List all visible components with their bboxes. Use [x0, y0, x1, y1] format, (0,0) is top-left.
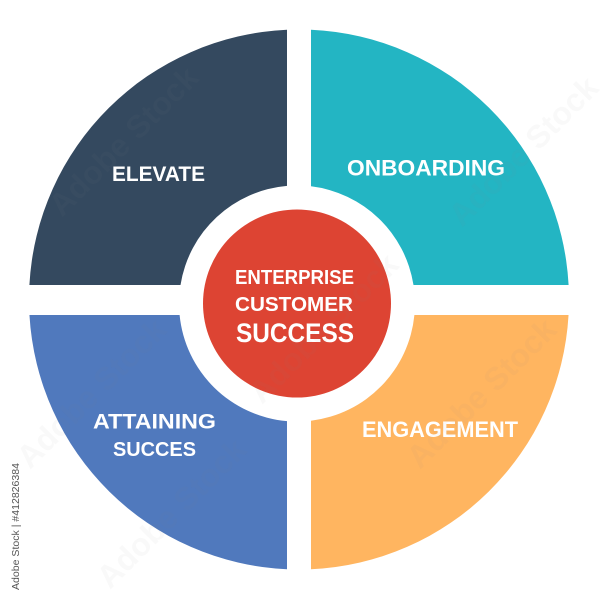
- watermark: faint stock marks: Adobe Stock: [399, 311, 563, 475]
- watermark: faint stock marks: Adobe Stock: [241, 246, 405, 410]
- center circle: enterprise customer success: SUCCESS: [236, 318, 354, 348]
- segment: elevate: ELEVATE: [112, 163, 205, 186]
- segment: attaining success: SUCCES: [113, 439, 196, 461]
- segment: attaining success: [29, 315, 287, 569]
- center circle: enterprise customer success: CUSTOMER: [235, 293, 353, 316]
- center circle: enterprise customer success: ENTERPRISE: [235, 266, 354, 289]
- segment: engagement: [311, 315, 569, 569]
- segment: elevate: [29, 30, 287, 285]
- segment: attaining success: ATTAINING: [93, 410, 216, 434]
- side credit: stock id: Adobe Stock | #412826384: [10, 463, 22, 590]
- segment: engagement: ENGAGEMENT: [362, 417, 519, 442]
- segment: onboarding: [311, 30, 569, 285]
- segment: onboarding: ONBOARDING: [347, 156, 505, 180]
- watermark: faint stock marks: Adobe Stock: [9, 311, 173, 475]
- center circle: enterprise customer success: [203, 210, 391, 398]
- watermark: faint stock marks: Adobe Stock: [89, 431, 253, 595]
- watermark: faint stock marks: Adobe Stock: [41, 59, 205, 223]
